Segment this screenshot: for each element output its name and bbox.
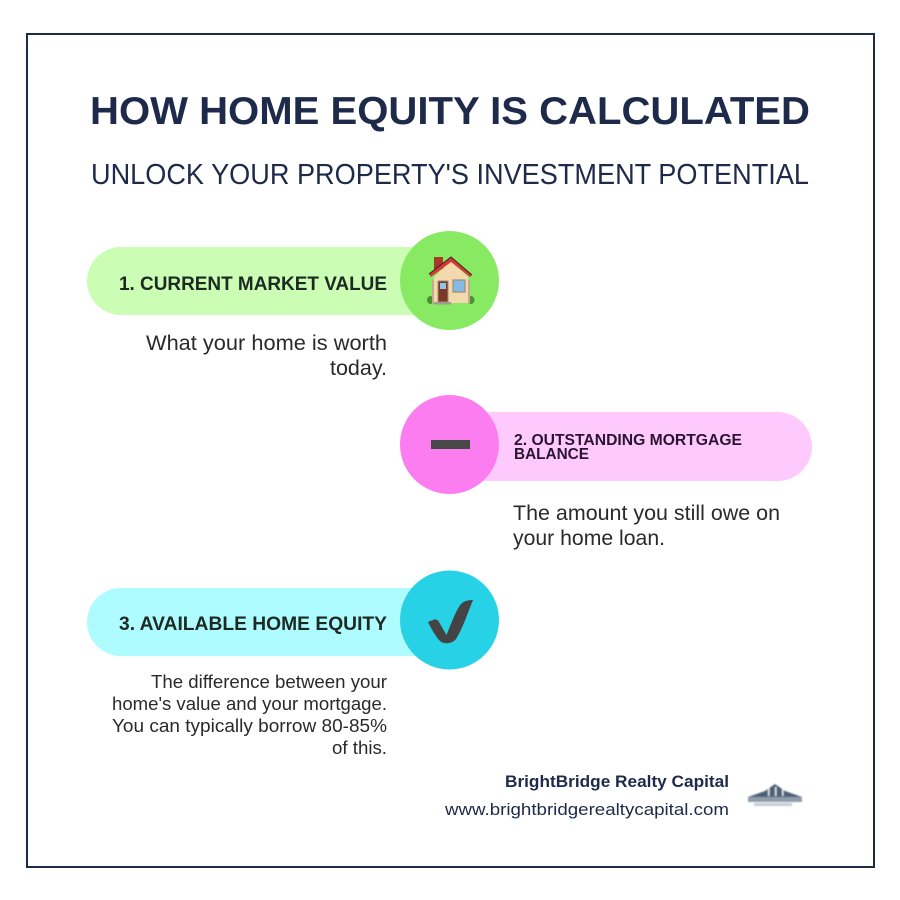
panel: step 1 current market value xyxy=(87,231,499,380)
step 2 description xyxy=(513,502,780,550)
step 3 circle xyxy=(400,570,499,670)
step 3 description xyxy=(112,671,387,758)
subtitle: UNLOCK YOUR PROPERTY'S INVESTMENT POTENTIAL xyxy=(91,159,809,191)
step 1 description: What your home is worth xyxy=(146,332,387,355)
step 2 label: BALANCE xyxy=(514,446,589,463)
step 2 circle xyxy=(400,395,499,494)
panel: step 3 available home equity xyxy=(87,570,499,758)
step 2 description: The amount you still owe on xyxy=(513,502,780,525)
step 3 description: The difference between your xyxy=(151,671,387,692)
step 3 description: home's value and your mortgage. xyxy=(112,693,387,714)
icon: company logo xyxy=(748,784,802,806)
step 1 circle xyxy=(400,231,499,330)
step 3 description: You can typically borrow 80-85% xyxy=(112,715,387,736)
step 2 label xyxy=(514,432,742,463)
website: www.brightbridgerealtycapital.com xyxy=(444,800,729,819)
step 1 pill xyxy=(87,247,449,315)
icon: minus xyxy=(431,440,470,449)
step 1 description xyxy=(146,332,387,380)
step 2 label: 2. OUTSTANDING MORTGAGE xyxy=(514,432,742,449)
footer: company details xyxy=(444,772,729,819)
step 1 label: 1. CURRENT MARKET VALUE xyxy=(119,274,387,295)
step 2 pill xyxy=(449,412,812,481)
panel: step 2 outstanding mortgage balance xyxy=(400,395,812,550)
icon: house xyxy=(427,257,474,304)
step 2 description: your home loan. xyxy=(513,527,665,550)
icon: check mark xyxy=(428,600,473,643)
step 3 pill xyxy=(87,588,449,656)
title: HOW HOME EQUITY IS CALCULATED xyxy=(90,90,810,133)
company name: BrightBridge Realty Capital xyxy=(505,772,729,791)
step 3 label: 3. AVAILABLE HOME EQUITY xyxy=(119,614,387,635)
step 3 description: of this. xyxy=(332,737,387,758)
step 1 description: today. xyxy=(330,357,387,380)
